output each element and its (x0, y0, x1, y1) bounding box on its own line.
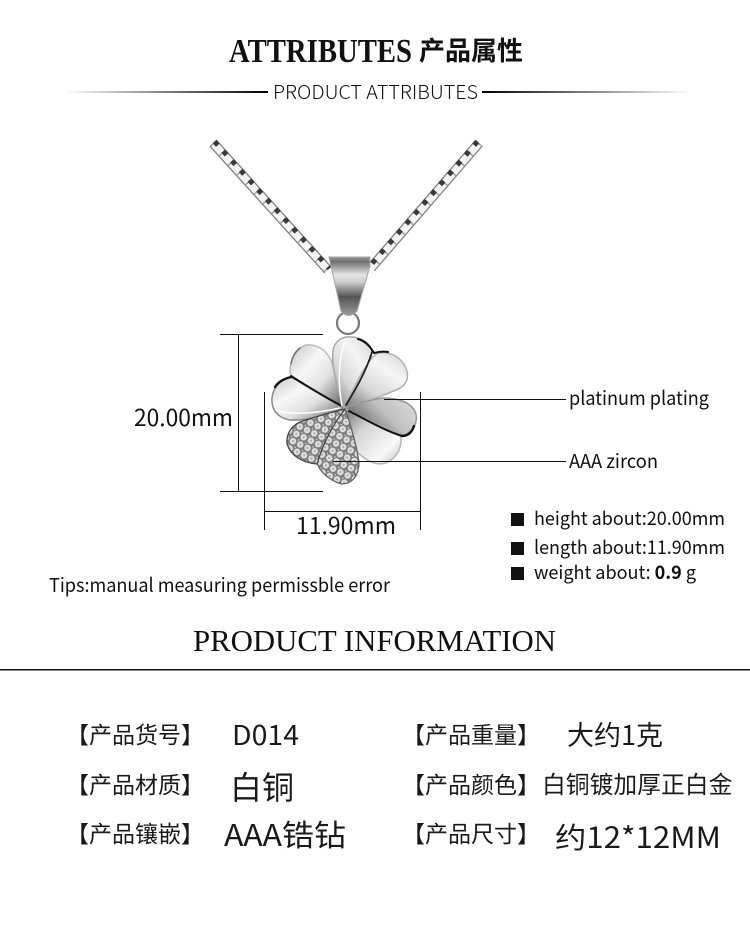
section heading: product information: PRODUCT INFORMATION (193, 623, 556, 658)
chain: right (370, 142, 479, 268)
row: colour: 白铜镀加厚正白金 (542, 765, 733, 800)
row: item number (66, 714, 299, 753)
zircon petal: left (287, 409, 345, 464)
title: 产品属性 (419, 31, 523, 68)
necklace illustration (213, 142, 479, 484)
row: material (66, 763, 294, 809)
pendant bail (329, 257, 370, 316)
petal: left (272, 377, 344, 420)
row: weight (402, 714, 663, 753)
info table (66, 714, 733, 857)
petal shadow lines (275, 339, 414, 436)
spec: height: height about:20.00mm (534, 505, 725, 531)
zircon petal: lower (317, 409, 359, 484)
row: size (402, 815, 721, 857)
row: item number: D014 (232, 714, 299, 753)
row: setting (66, 811, 346, 855)
spec: weight: weight about: 0.9 g (534, 559, 697, 585)
petal: upper left (290, 345, 344, 408)
petal: upper right (344, 353, 407, 408)
row: item number: 【产品货号】 (66, 716, 204, 750)
dimension: width: 11.90mm (296, 507, 396, 541)
row: colour: 【产品颜色】 (402, 766, 540, 800)
row: material: 白铜 (230, 763, 294, 809)
title (229, 31, 523, 70)
row: setting: AAA锆钻 (224, 811, 346, 855)
row: size: 【产品尺寸】 (402, 815, 540, 849)
petal: top (333, 337, 372, 408)
spec: length: length about:11.90mm (534, 534, 725, 560)
petal: right (344, 398, 416, 436)
row: colour (402, 765, 733, 800)
pendant ring (337, 312, 359, 334)
clover pendant (272, 337, 416, 484)
title: ATTRIBUTES (229, 33, 412, 70)
section divider (0, 669, 750, 670)
row: size: 约12*12MM (555, 815, 721, 857)
petal: lower right (344, 408, 401, 464)
chain: left (213, 142, 330, 270)
callout: platinum plating: platinum plating (569, 384, 709, 411)
row: setting: 【产品镶嵌】 (66, 815, 204, 849)
spec list (511, 505, 725, 585)
row: material: 【产品材质】 (66, 766, 204, 800)
subtitle with fading rules: PRODUCT ATTRIBUTES (273, 78, 478, 105)
row: weight: 【产品重量】 (402, 716, 540, 750)
row: weight: 大约1克 (567, 714, 663, 753)
dimension: height: 20.00mm (134, 399, 233, 433)
callout: AAA zircon: AAA zircon (569, 447, 658, 474)
tips note: Tips:manual measuring permissble error (49, 571, 391, 598)
